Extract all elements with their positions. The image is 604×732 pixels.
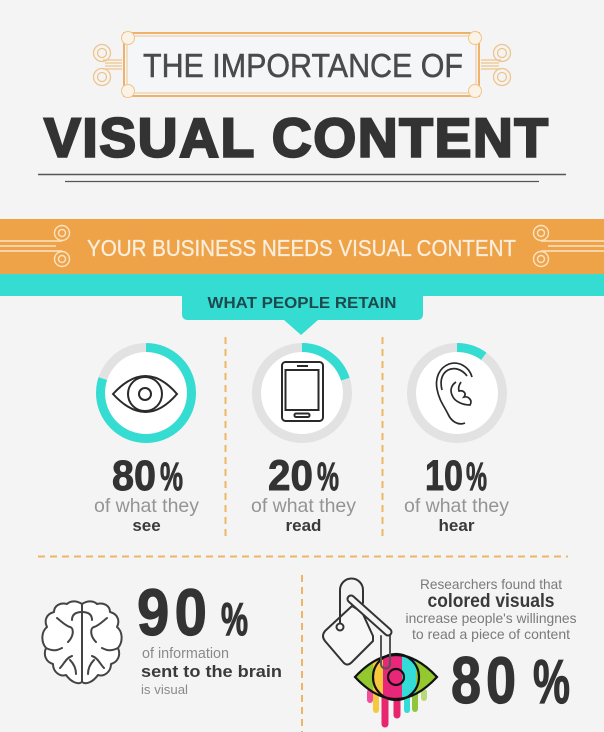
panel: 10 percent hear [404,348,509,535]
text: of information sent to the brain is visual [141,646,282,697]
label: of what they read: read [286,516,321,535]
panel: 80 percent colored visuals [323,576,576,724]
label: of what they hear: of what they [404,495,509,517]
icon: paint bucket and colored eye [323,578,442,724]
stat: 10%: % [466,455,487,499]
stat: 90% [137,577,248,650]
panel: 20 percent read [251,348,356,535]
icon: eye [113,376,177,412]
label: of what they hear: hear [439,516,475,535]
icon: ear [436,363,472,424]
stat: 80% [112,452,183,500]
stat: 90%: 90 [137,577,212,650]
text: researchers found: Researchers found that [420,576,562,592]
teal band and callout [0,274,604,335]
title underlines [38,174,566,182]
panel: 90 percent brain [42,577,282,697]
banner scroll ornaments [0,226,604,266]
label: of what they see [94,495,199,535]
text: of information sent to the brain is visual: is visual [141,682,188,697]
stat: 90%: % [221,593,248,645]
callout heading: WHAT PEOPLE RETAIN [208,295,396,312]
title line: visual content: VISUAL CONTENT [44,106,548,168]
text: researchers found: increase people's willingnes [406,610,576,626]
text: researchers found: to read a piece of content [412,626,570,642]
label: of what they hear [404,495,509,535]
text: researchers found [406,576,576,642]
donut: 10 percent [412,348,502,438]
label: of what they see: see [132,516,161,535]
orange banner [0,219,604,274]
stat: 80%: % [533,648,570,717]
stat: 20%: % [317,455,339,499]
paint bucket [323,578,390,668]
label: of what they read: of what they [251,495,356,517]
title line: the importance of: THE IMPORTANCE OF [143,47,463,84]
icon: brain [42,601,122,683]
text: of information sent to the brain is visual: of information [142,646,229,662]
donut: 20 percent [256,348,348,438]
stat: 80%: 80 [112,452,156,500]
text: researchers found: colored visuals [428,591,554,612]
donut: 80 percent [100,348,192,438]
stat: 80%: % [160,455,183,499]
stat: 20% [268,452,339,500]
stat: 80% [451,643,570,717]
label: of what they read [251,495,356,535]
stat: 80%: 80 [451,643,521,717]
stat: 20%: 20 [268,452,313,500]
icon: smartphone [282,362,323,421]
banner heading: YOUR BUSINESS NEEDS VISUAL CONTENT [87,235,516,261]
colored eye [356,656,436,698]
text: of information sent to the brain is visual: sent to the brain [141,662,282,681]
panel: 80 percent see [94,348,199,535]
stat: 10%: 10 [425,452,463,500]
label: of what they see: of what they [94,495,199,517]
ornamental title frame [94,32,510,98]
paint drips [370,692,424,724]
dashed dividers [38,337,568,732]
